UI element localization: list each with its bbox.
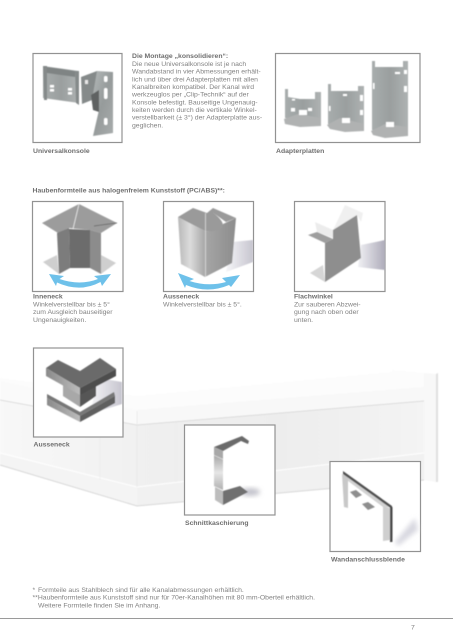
text block: Die Montage: verstellbarkeit (± 3°) der Adapterplatte aus- bbox=[132, 114, 262, 122]
text block: Die Montage: keiten werden durch die vertikale Winkel- bbox=[132, 107, 257, 114]
heading: Haubenformteile: Haubenformteile aus halogenfreiem Kunststoff (PC/ABS)**: bbox=[32, 188, 225, 194]
icon: inner corner cover bbox=[42, 204, 117, 274]
text: Flachwinkel: unten. bbox=[294, 317, 313, 324]
label: Ausseneck Stahlblech: Ausseneck bbox=[34, 442, 70, 448]
footnotes bbox=[32, 587, 315, 610]
text: Inneneck bbox=[33, 294, 113, 324]
text block: Die Montage: Kanalbreiten kompatibel. Der Kanal wird bbox=[132, 84, 254, 91]
text block: Die Montage: Konsole befestigt. Bauseitige Ungenauig- bbox=[132, 99, 258, 106]
panel: Wandanschlussblende bbox=[330, 462, 420, 552]
text: Inneneck: Ungenauigkeiten. bbox=[33, 317, 86, 324]
text: Ausseneck Haube: Ausseneck bbox=[163, 294, 199, 300]
text: Ausseneck Haube bbox=[163, 294, 242, 308]
footnotes: Formteile aus Stahlblech sind für alle Kanalabmessungen erhältlich. bbox=[38, 587, 244, 594]
text: Flachwinkel: Zur sauberen Abzwei- bbox=[294, 302, 361, 308]
page number: 7 bbox=[411, 624, 415, 632]
panel: Adapterplatten bbox=[276, 54, 420, 142]
label: Schnittkaschierung: Schnittkaschierung bbox=[185, 520, 249, 527]
panel: Universalkonsole bbox=[33, 54, 122, 142]
text block: Die Montage: geglichen. bbox=[132, 122, 163, 129]
label: Adapterplatten: Adapterplatten bbox=[276, 148, 324, 155]
panel: Schnittkaschierung bbox=[184, 425, 275, 515]
background: white cable duct wall bbox=[0, 370, 438, 506]
icon: T-shaped outer corner bbox=[46, 358, 122, 422]
label: Universalkonsole: Universalkonsole bbox=[33, 148, 90, 155]
text: Inneneck: Inneneck bbox=[33, 294, 63, 300]
text block: Die Montage: lich und über drei Adapterplatten mit allen bbox=[132, 76, 258, 83]
text: Flachwinkel: Flachwinkel bbox=[294, 294, 333, 300]
footnotes: Weitere Formteile finden Sie im Anhang. bbox=[38, 602, 160, 610]
text: Flachwinkel: gung nach oben oder bbox=[294, 309, 359, 316]
text: Flachwinkel bbox=[294, 294, 361, 324]
icon: wall connection frame bbox=[342, 471, 418, 546]
text block: Die Montage: werkzeuglos per „Clip-Technik“ auf der bbox=[131, 92, 249, 99]
arrow: blue double arrow bbox=[49, 274, 111, 288]
icon: universal bracket bbox=[43, 66, 113, 136]
panel: Ausseneck Stahlblech bbox=[34, 348, 123, 437]
text: Inneneck: Winkelverstellbar bis ± 5° bbox=[33, 300, 110, 308]
text: Ausseneck Haube: Winkelverstellbar bis ± 5°. bbox=[163, 300, 242, 308]
panel: Inneneck bbox=[32, 202, 123, 292]
label: Wandanschlussblende: Wandanschlussblende bbox=[331, 556, 405, 564]
footnotes: * bbox=[32, 587, 36, 594]
icon: outer corner cover bbox=[178, 208, 253, 277]
text block: Die Montage: Die neue Universalkonsole ist je nach bbox=[132, 61, 246, 68]
panel: Aussenecke Haube bbox=[164, 202, 254, 292]
text block: Die Montage: Wandabstand in vier Abmessungen erhält- bbox=[132, 69, 261, 76]
text block: Die Montage bbox=[131, 53, 262, 129]
arrow: blue double arrow bbox=[178, 273, 240, 290]
icon: three adapter plates bbox=[284, 61, 408, 138]
text block: Die Montage: Die Montage „konsolidieren“: bbox=[132, 53, 228, 60]
footnotes: **Haubenformteile aus Kunststoff sind nur für 70er-Kanalhöhen mit 80 mm-Oberteil erhältlich. bbox=[32, 594, 315, 602]
text: Inneneck: zum Ausgleich bauseitiger bbox=[33, 309, 113, 316]
icon: flat angle cover bbox=[308, 205, 385, 282]
icon: cut cover bbox=[214, 436, 260, 505]
panel: Flachwinkel bbox=[294, 202, 385, 292]
